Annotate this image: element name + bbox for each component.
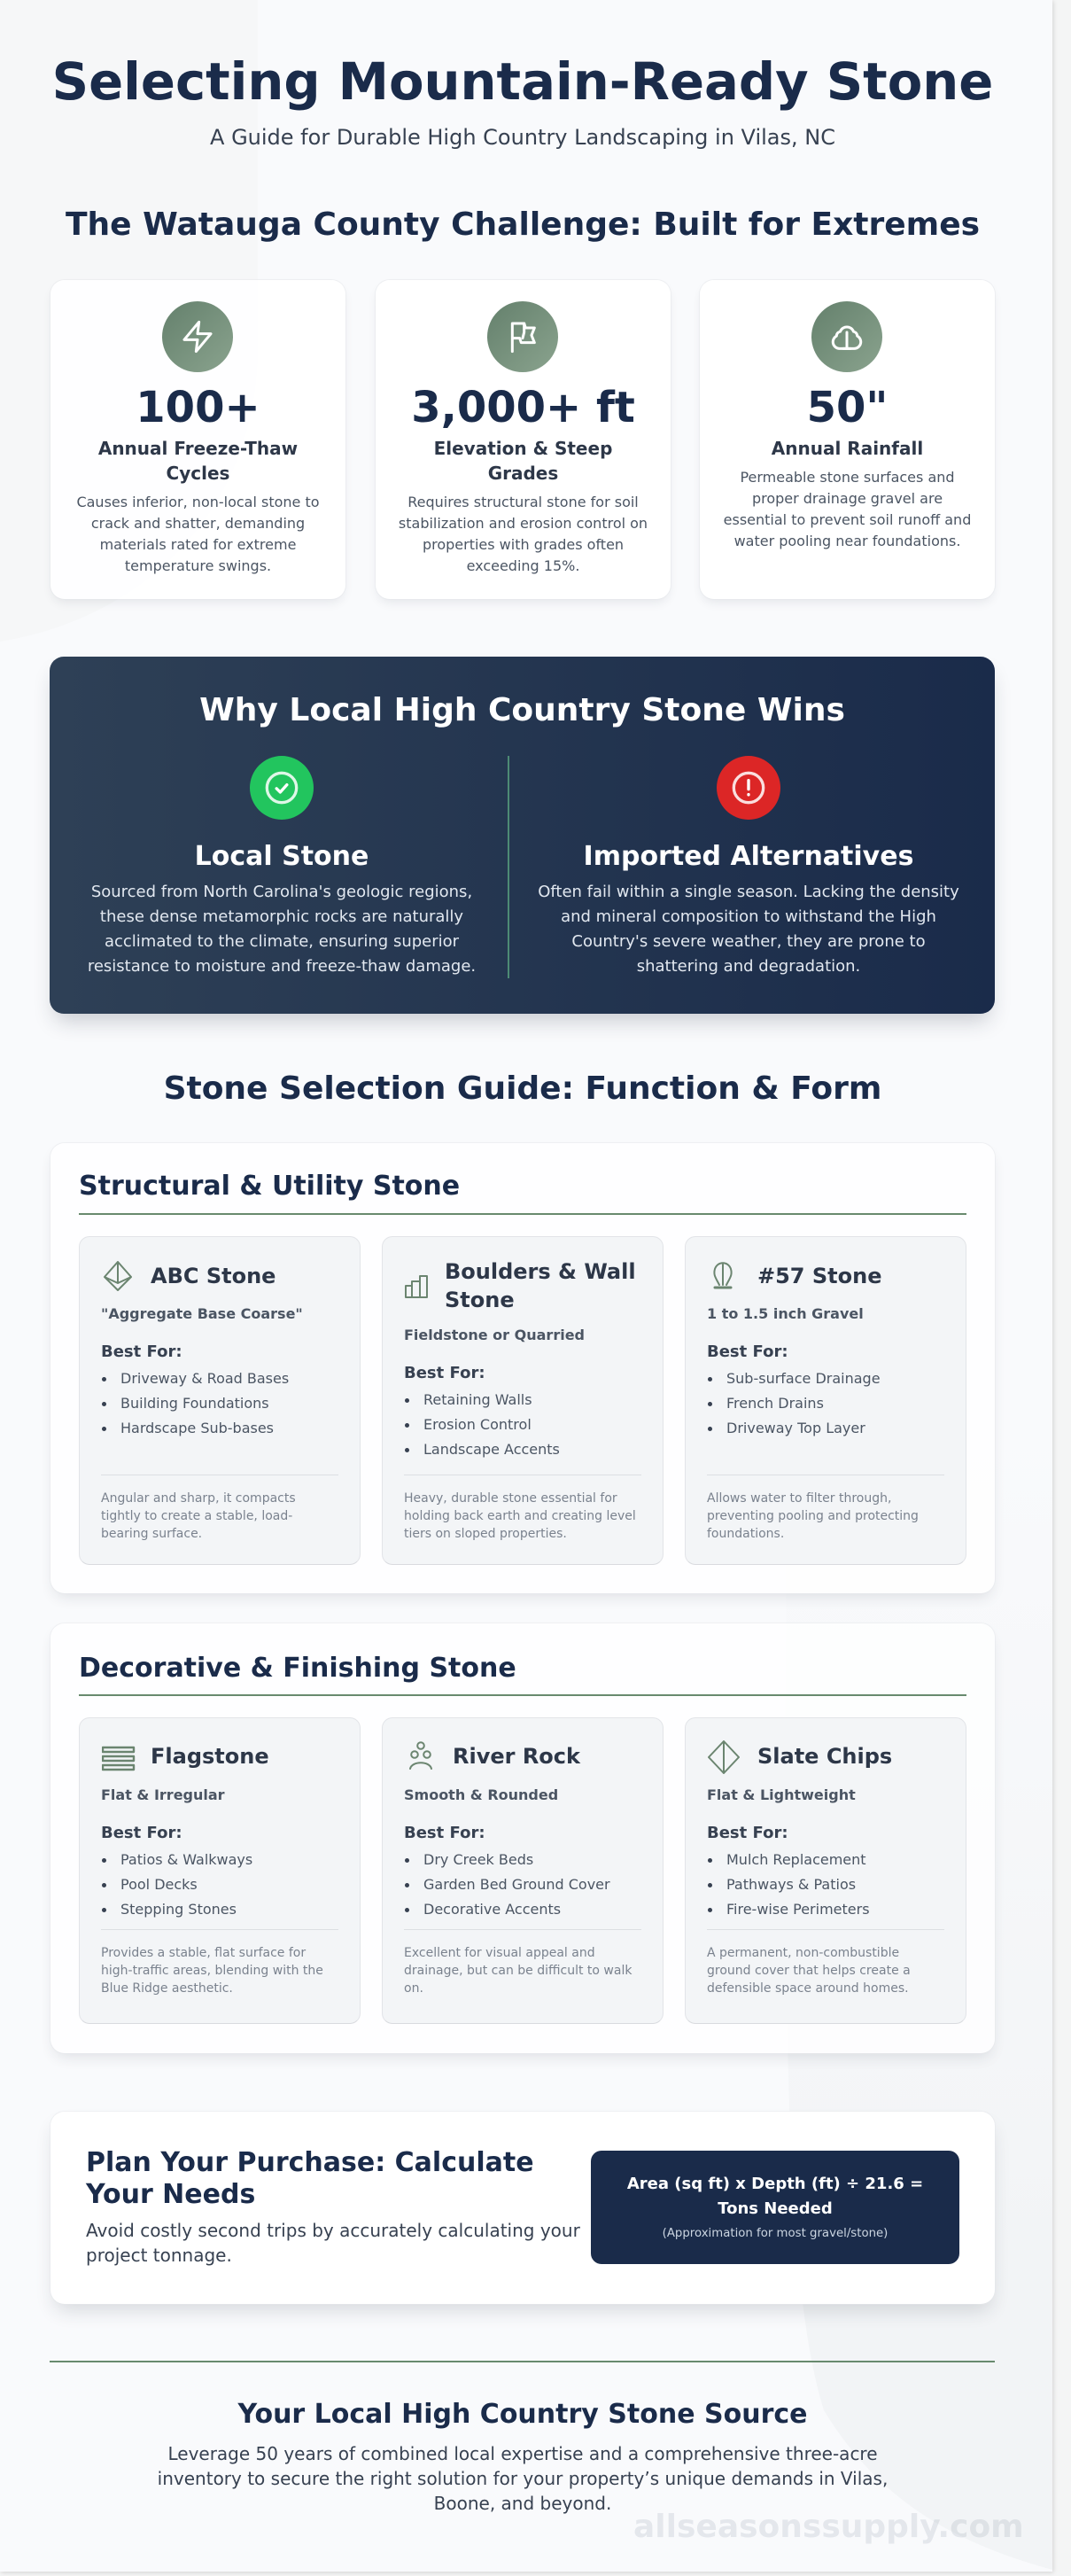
stone note <box>404 1491 636 1541</box>
stone note: holding back earth and creating level <box>404 1509 636 1523</box>
panel: plan your purchase <box>50 2112 995 2304</box>
uses list: Pool Decks <box>120 1876 198 1893</box>
uses list: French Drains <box>726 1395 824 1412</box>
imported alternatives text: shattering and degradation. <box>637 957 860 976</box>
uses list <box>405 1391 560 1458</box>
plan heading: Your Needs <box>86 2179 255 2210</box>
local stone text: these dense metamorphic rocks are naturally <box>100 907 463 926</box>
stat label <box>98 438 298 484</box>
stone subtitle: "Aggregate Base Coarse" <box>101 1305 303 1322</box>
stat description: Permeable stone surfaces and <box>740 469 955 486</box>
formula note: (Approximation for most gravel/stone) <box>663 2227 888 2240</box>
stone note: defensible space around homes. <box>707 1981 909 1996</box>
icon: river pebbles <box>409 1741 432 1770</box>
icon: gem <box>104 1261 132 1291</box>
imported alternatives text <box>538 883 959 976</box>
panel heading: Decorative & Finishing Stone <box>79 1653 516 1684</box>
icon: layered slabs <box>102 1746 135 1771</box>
card: ABC stone <box>79 1236 361 1565</box>
local stone text: resistance to moisture and freeze-thaw damage. <box>88 957 476 976</box>
stat label: Grades <box>488 463 558 484</box>
stat description: water pooling near foundations. <box>734 533 960 549</box>
icon: bar blocks <box>405 1275 428 1298</box>
footer text <box>158 2443 888 2514</box>
stat label: Elevation & Steep <box>434 438 612 459</box>
uses list: Sub-surface Drainage <box>726 1370 881 1387</box>
icon: alert circle <box>717 756 780 820</box>
plan heading: Plan Your Purchase: Calculate <box>86 2147 534 2178</box>
panel heading: Structural & Utility Stone <box>79 1171 460 1202</box>
stat label: Annual Freeze-Thaw <box>98 438 298 459</box>
best for label: Best For: <box>707 1342 788 1361</box>
local stone text: acclimated to the climate, ensuring superior <box>105 932 459 951</box>
icon: slate diamond <box>708 1740 740 1774</box>
stone name: #57 Stone <box>757 1264 881 1288</box>
plan text: Avoid costly second trips by accurately calculating your <box>86 2220 580 2241</box>
stat description: stabilization and erosion control on <box>399 515 648 532</box>
stat description: exceeding 15%. <box>467 557 579 574</box>
stat description <box>724 469 971 549</box>
card: slate chips <box>685 1717 966 2024</box>
stone name: Boulders & Wall <box>445 1259 636 1284</box>
stone note: Provides a stable, flat surface for <box>101 1946 306 1960</box>
stone note: preventing pooling and protecting <box>707 1509 919 1523</box>
imported alternatives text: Often fail within a single season. Lacking the density <box>538 883 959 901</box>
uses list: Landscape Accents <box>423 1441 560 1458</box>
stone name <box>445 1259 636 1312</box>
stone name: Flagstone <box>151 1744 269 1769</box>
stone subtitle: Fieldstone or Quarried <box>404 1327 585 1343</box>
stone note: A permanent, non-combustible <box>707 1946 899 1960</box>
stat label: Annual Rainfall <box>772 438 923 459</box>
best for label: Best For: <box>404 1824 485 1842</box>
stone note: foundations. <box>707 1527 784 1541</box>
stone note: Heavy, durable stone essential for <box>404 1491 617 1506</box>
stone subtitle: Flat & Irregular <box>101 1786 225 1803</box>
panel: why local stone wins <box>50 657 995 1014</box>
stat number: 100+ <box>136 383 260 432</box>
card: #57 stone <box>685 1236 966 1565</box>
imported alternatives text: and mineral composition to withstand the High <box>561 907 936 926</box>
icon: check circle <box>250 756 314 820</box>
stone name: Slate Chips <box>757 1744 892 1769</box>
uses list: Garden Bed Ground Cover <box>423 1876 610 1893</box>
imported alternatives text: Country's severe weather, they are prone to <box>571 932 926 951</box>
local stone heading: Local Stone <box>195 841 369 872</box>
uses list: Hardscape Sub-bases <box>120 1420 274 1436</box>
uses list: Decorative Accents <box>423 1901 561 1918</box>
stone note <box>707 1491 919 1541</box>
formula box <box>591 2151 959 2264</box>
stone name: River Rock <box>453 1744 580 1769</box>
stone subtitle: Flat & Lightweight <box>707 1786 856 1803</box>
uses list: Erosion Control <box>423 1416 532 1433</box>
stone name: ABC Stone <box>151 1264 276 1288</box>
stone note: tiers on sloped properties. <box>404 1527 567 1541</box>
stat label: Cycles <box>167 463 229 484</box>
stat description <box>399 494 648 574</box>
watermark: allseasonssupply.com <box>633 2509 1024 2545</box>
uses list <box>708 1370 881 1436</box>
stat number: 3,000+ ft <box>411 383 635 432</box>
uses list: Pathways & Patios <box>726 1876 856 1893</box>
heading rule <box>79 1694 966 1696</box>
stat description: temperature swings. <box>125 557 271 574</box>
uses list <box>708 1851 870 1918</box>
card: river rock <box>382 1717 664 2024</box>
stone note: Excellent for visual appeal and <box>404 1946 595 1960</box>
panel: freeze-thaw stat card <box>50 280 345 599</box>
stone note: drainage, but can be difficult to walk <box>404 1964 632 1978</box>
stone note: tightly to create a stable, load- <box>101 1509 292 1523</box>
stat description: crack and shatter, demanding <box>91 515 305 532</box>
stone note <box>101 1946 323 1996</box>
footer text: Boone, and beyond. <box>434 2493 611 2514</box>
stone note: high-traffic areas, blending with the <box>101 1964 323 1978</box>
plan text <box>86 2220 580 2266</box>
formula: Area (sq ft) x Depth (ft) ÷ 21.6 = <box>627 2175 923 2193</box>
heading rule <box>79 1213 966 1215</box>
section heading: selection guide: Stone Selection Guide: Function & Form <box>164 1070 881 1107</box>
column divider <box>508 756 509 978</box>
stat description: properties with grades often <box>423 536 624 553</box>
stone subtitle: 1 to 1.5 inch Gravel <box>707 1305 864 1322</box>
uses list: Building Foundations <box>120 1395 269 1412</box>
plan text: project tonnage. <box>86 2245 232 2266</box>
uses list: Mulch Replacement <box>726 1851 866 1868</box>
uses list <box>405 1851 610 1918</box>
stat description <box>76 494 320 574</box>
card divider <box>404 1929 641 1930</box>
uses list <box>102 1851 252 1918</box>
panel: rainfall stat card <box>700 280 995 599</box>
panel heading: Why Local High Country Stone Wins <box>199 692 845 728</box>
uses list: Fire-wise Perimeters <box>726 1901 870 1918</box>
stone note: Angular and sharp, it compacts <box>101 1491 296 1506</box>
uses list: Retaining Walls <box>423 1391 532 1408</box>
stone note: on. <box>404 1981 423 1996</box>
card: flagstone <box>79 1717 361 2024</box>
card divider <box>707 1929 944 1930</box>
footer rule <box>50 2361 995 2362</box>
formula: Tons Needed <box>718 2199 833 2218</box>
stone note: bearing surface. <box>101 1527 202 1541</box>
stone name: Stone <box>445 1288 515 1312</box>
local stone text: Sourced from North Carolina's geologic regions, <box>91 883 472 901</box>
stat label <box>434 438 612 484</box>
local stone text <box>88 883 476 976</box>
uses list: Driveway & Road Bases <box>120 1370 289 1387</box>
best for label: Best For: <box>404 1364 485 1382</box>
uses list: Stepping Stones <box>120 1901 237 1918</box>
best for label: Best For: <box>707 1824 788 1842</box>
stone note: Blue Ridge aesthetic. <box>101 1981 233 1996</box>
subtitle: A Guide for Durable High Country Landscaping in Vilas, NC <box>210 125 835 150</box>
best for label: Best For: <box>101 1824 182 1842</box>
footer text: Leverage 50 years of combined local expertise and a comprehensive three-acre <box>167 2443 878 2464</box>
icon: lightning bolt <box>162 301 233 372</box>
stone note <box>707 1946 911 1996</box>
uses list: Patios & Walkways <box>120 1851 252 1868</box>
footer text: inventory to secure the right solution for your property’s unique demands in Vilas, <box>158 2468 888 2489</box>
stone note <box>404 1946 633 1996</box>
stone subtitle: Smooth & Rounded <box>404 1786 558 1803</box>
plan heading <box>85 2147 534 2210</box>
card: boulders and wall stone <box>382 1236 664 1565</box>
icon: flag <box>487 301 558 372</box>
stone note: ground cover that helps create a <box>707 1964 911 1978</box>
card divider <box>101 1929 338 1930</box>
stone note <box>101 1491 296 1541</box>
stone note: Allows water to filter through, <box>707 1491 891 1506</box>
stat description: essential to prevent soil runoff and <box>724 511 971 528</box>
imported alternatives heading: Imported Alternatives <box>584 841 913 872</box>
panel: elevation stat card <box>376 280 671 599</box>
stat description: Causes inferior, non-local stone to <box>76 494 320 510</box>
formula <box>627 2175 923 2218</box>
icon: gravel funnel <box>713 1262 733 1288</box>
section heading: challenge: The Watauga County Challenge: Built for Extremes <box>66 206 980 243</box>
stat number: 50" <box>807 383 888 432</box>
best for label: Best For: <box>101 1342 182 1361</box>
stat description: proper drainage gravel are <box>752 490 943 507</box>
stat description: Requires structural stone for soil <box>407 494 639 510</box>
uses list: Dry Creek Beds <box>423 1851 533 1868</box>
panel: decorative and finishing stone <box>50 1623 995 2053</box>
footer heading: Your Local High Country Stone Source <box>237 2399 808 2430</box>
stat description: materials rated for extreme <box>100 536 296 553</box>
uses list: Driveway Top Layer <box>726 1420 865 1436</box>
uses list <box>102 1370 289 1436</box>
panel: structural and utility stone <box>50 1143 995 1593</box>
icon: cloud rain <box>811 301 882 372</box>
title: Selecting Mountain-Ready Stone <box>52 52 993 112</box>
